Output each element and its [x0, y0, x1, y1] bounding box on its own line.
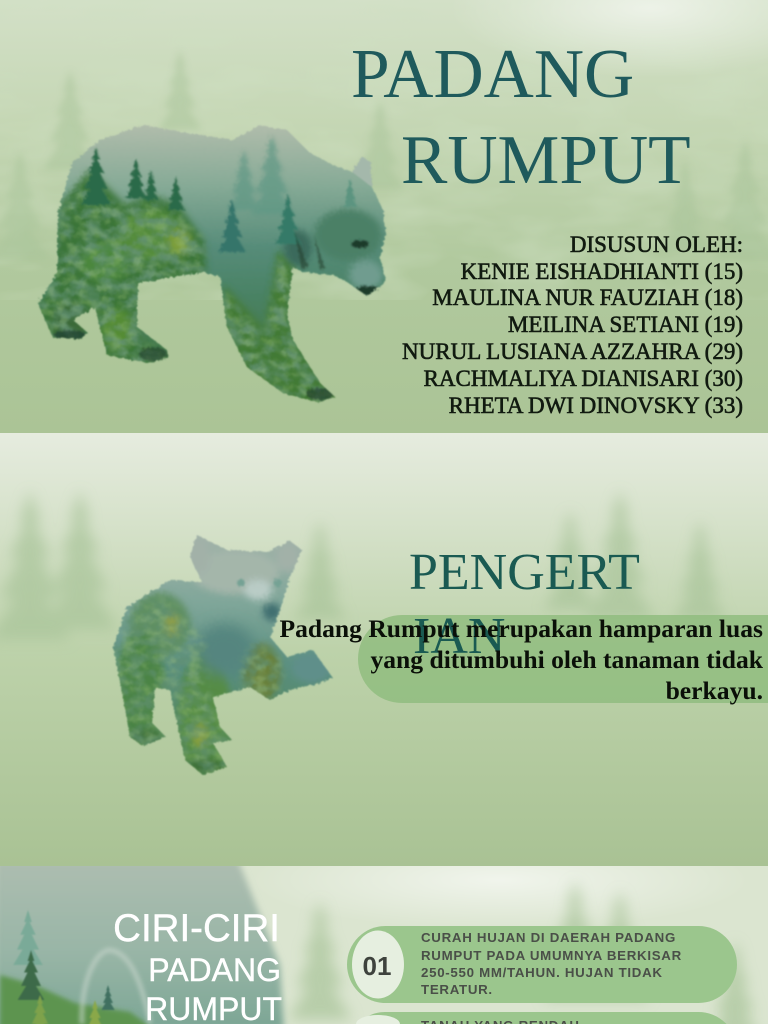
title: RUMPUT — [401, 122, 691, 199]
item 01 — [347, 926, 737, 1003]
image: misty bear detail — [0, 860, 284, 1024]
pill — [347, 926, 737, 1003]
slide background — [236, 866, 768, 1024]
text block: definition — [279, 614, 764, 705]
heading: ciri-ciri: CIRI-CIRI — [113, 907, 280, 950]
text block: authors — [402, 232, 743, 418]
panel: pengertian slide — [0, 433, 768, 776]
text block: definition: berkayu. — [666, 676, 763, 705]
heading: pengertian: PENGERT — [409, 544, 640, 601]
text block: authors: KENIE EISHADHIANTI (15) — [461, 259, 743, 284]
slide background — [0, 0, 768, 300]
text block: authors: RHETA DWI DINOVSKY (33) — [449, 393, 743, 418]
heading: pengertian: IAN — [413, 608, 505, 665]
panel: ciri-ciri slide — [0, 866, 768, 1024]
title: PADANG — [351, 36, 634, 113]
text block: definition: Padang Rumput merupakan hamparan luas — [279, 614, 763, 643]
text block: authors: MAULINA NUR FAUZIAH (18) — [432, 285, 743, 310]
text block: authors: MEILINA SETIANI (19) — [508, 312, 743, 337]
item 02 — [347, 1012, 737, 1024]
panel: title slide — [0, 0, 768, 433]
image: forest bear — [30, 120, 390, 410]
title — [353, 50, 690, 184]
text block: authors: NURUL LUSIANA AZZAHRA (29) — [402, 339, 743, 364]
slide background — [0, 433, 768, 758]
heading: pengertian — [410, 554, 640, 653]
pill: definition background — [358, 615, 768, 703]
text block: authors: RACHMALIYA DIANISARI (30) — [424, 366, 743, 391]
heading: ciri-ciri — [113, 907, 282, 1024]
item text: TERATUR. — [421, 982, 493, 997]
number badge — [352, 930, 404, 998]
text block: authors: DISUSUN OLEH: — [570, 232, 743, 257]
item text: 250-550 MM/TAHUN. HUJAN TIDAK — [421, 965, 663, 980]
image: forest bear cub — [105, 530, 340, 780]
heading: ciri-ciri: PADANG — [148, 952, 281, 988]
item text: RUMPUT PADA UMUMNYA BERKISAR — [421, 948, 682, 963]
item text: CURAH HUJAN DI DAERAH PADANG — [421, 930, 676, 945]
text block: definition: yang ditumbuhi oleh tanaman tidak — [370, 645, 764, 674]
item text — [421, 930, 682, 997]
number badge: 01 — [363, 951, 391, 981]
